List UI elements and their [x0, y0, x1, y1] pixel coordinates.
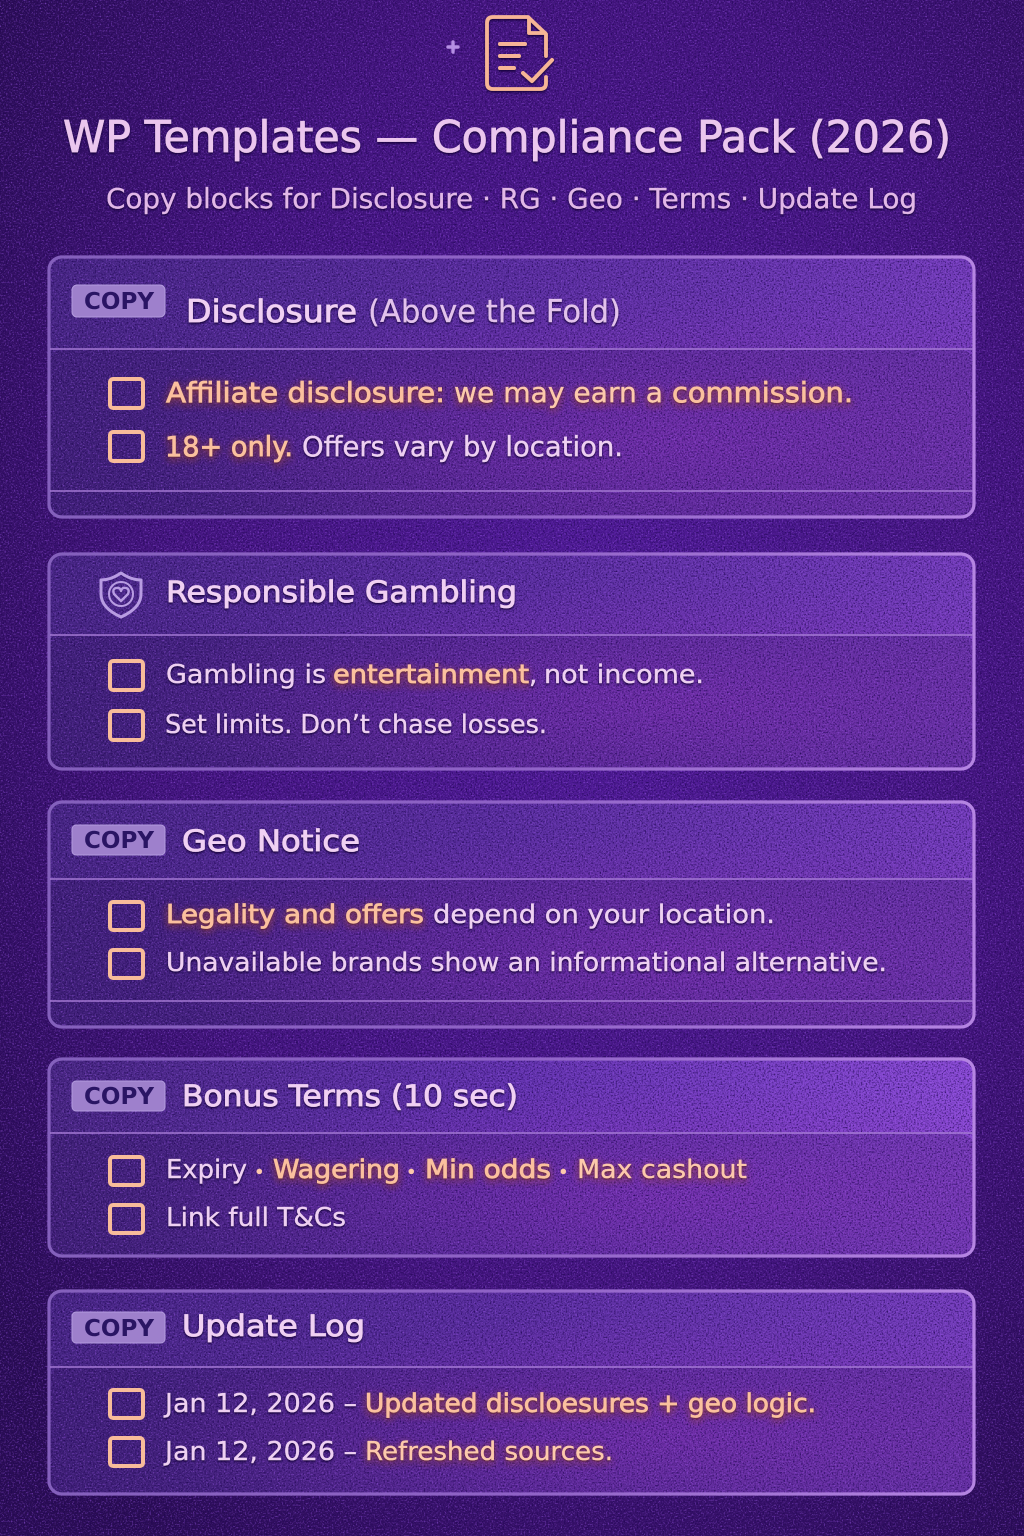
- checkbox: [110, 379, 143, 408]
- item: unavailable brands: Unavailable brands show an informational alternative.: [166, 948, 887, 978]
- copy badge: COPY: [84, 1084, 154, 1110]
- checkbox: [110, 950, 143, 978]
- title: WP Templates — Compliance Pack (2026): [63, 112, 951, 163]
- checkbox: [110, 1390, 143, 1418]
- item: entertainment: not income.: [544, 660, 704, 690]
- copy badge: COPY: [84, 289, 154, 315]
- item: update two: Refreshed sources.: [365, 1437, 613, 1467]
- heading: Geo Notice: [182, 824, 360, 858]
- copy badge: COPY: [84, 828, 154, 854]
- panel: responsible gambling: [49, 554, 974, 769]
- item: entertainment: ,: [529, 660, 537, 690]
- item: 18+ only: 18+ only.: [165, 431, 293, 463]
- heading: Disclosure: [186, 294, 357, 330]
- item: affiliate disclosure: [166, 377, 853, 409]
- checkbox: [110, 1438, 143, 1466]
- panel: update log: [49, 1291, 974, 1494]
- heading: Responsible Gambling: [166, 575, 517, 609]
- copy badge: [72, 1081, 165, 1111]
- item: terms list: Wagering: [273, 1155, 400, 1185]
- item: terms list: Max cashout: [577, 1155, 747, 1185]
- item: affiliate disclosure: Affiliate disclosure:: [166, 377, 445, 409]
- item: update two: [163, 1437, 613, 1467]
- checkbox: [110, 1157, 143, 1185]
- heading: Update Log: [182, 1309, 365, 1343]
- item: update one: Updated discloesures + geo logic.: [365, 1389, 816, 1419]
- item: affiliate disclosure: commission.: [672, 377, 853, 409]
- item: update one: Jan 12, 2026 –: [163, 1389, 357, 1419]
- checkbox: [110, 711, 143, 740]
- checkbox: [110, 1205, 143, 1233]
- copy badge: [72, 1312, 165, 1343]
- heading: Bonus Terms (10 sec): [182, 1079, 518, 1113]
- item: set limits: Set limits. Don’t chase losses.: [165, 710, 547, 740]
- item: terms list: [166, 1155, 747, 1185]
- item: legality: Legality and offers: [166, 900, 424, 930]
- item: update one: [163, 1389, 816, 1419]
- copy badge: [72, 285, 165, 317]
- item: entertainment: entertainment: [333, 660, 529, 690]
- item: terms list: •: [406, 1162, 417, 1183]
- item: entertainment: Gambling is: [166, 660, 326, 690]
- panel: bonus terms: [49, 1059, 974, 1256]
- copy badge: COPY: [84, 1316, 154, 1342]
- panel: disclosure: [49, 257, 974, 517]
- item: update two: Jan 12, 2026 –: [163, 1437, 357, 1467]
- item: entertainment: [166, 660, 704, 690]
- item: legality: depend on your location.: [433, 900, 775, 930]
- item: terms list: Expiry: [166, 1155, 247, 1185]
- heading: [186, 294, 621, 330]
- subtitle: Copy blocks for Disclosure · RG · Geo · Terms · Update Log: [106, 183, 917, 215]
- item: terms list: Min odds: [425, 1155, 551, 1185]
- checkbox: [110, 432, 143, 461]
- item: terms list: •: [254, 1162, 265, 1183]
- icon: compliance document with check: [487, 17, 552, 89]
- item: 18+ only: Offers vary by location.: [302, 431, 623, 463]
- checkbox: [110, 661, 143, 690]
- item: 18+ only: [165, 431, 623, 463]
- item: legality: [166, 900, 775, 930]
- copy badge: [72, 825, 165, 855]
- checkbox: [110, 902, 143, 930]
- icon: sparkle plus: [448, 42, 458, 52]
- item: link T&Cs: Link full T&Cs: [166, 1203, 346, 1233]
- panel: geo notice: [49, 802, 974, 1027]
- heading: (Above the Fold): [368, 294, 621, 330]
- icon: shield with heart: [101, 573, 141, 617]
- item: affiliate disclosure: we may earn a: [454, 377, 663, 409]
- item: terms list: •: [558, 1162, 569, 1183]
